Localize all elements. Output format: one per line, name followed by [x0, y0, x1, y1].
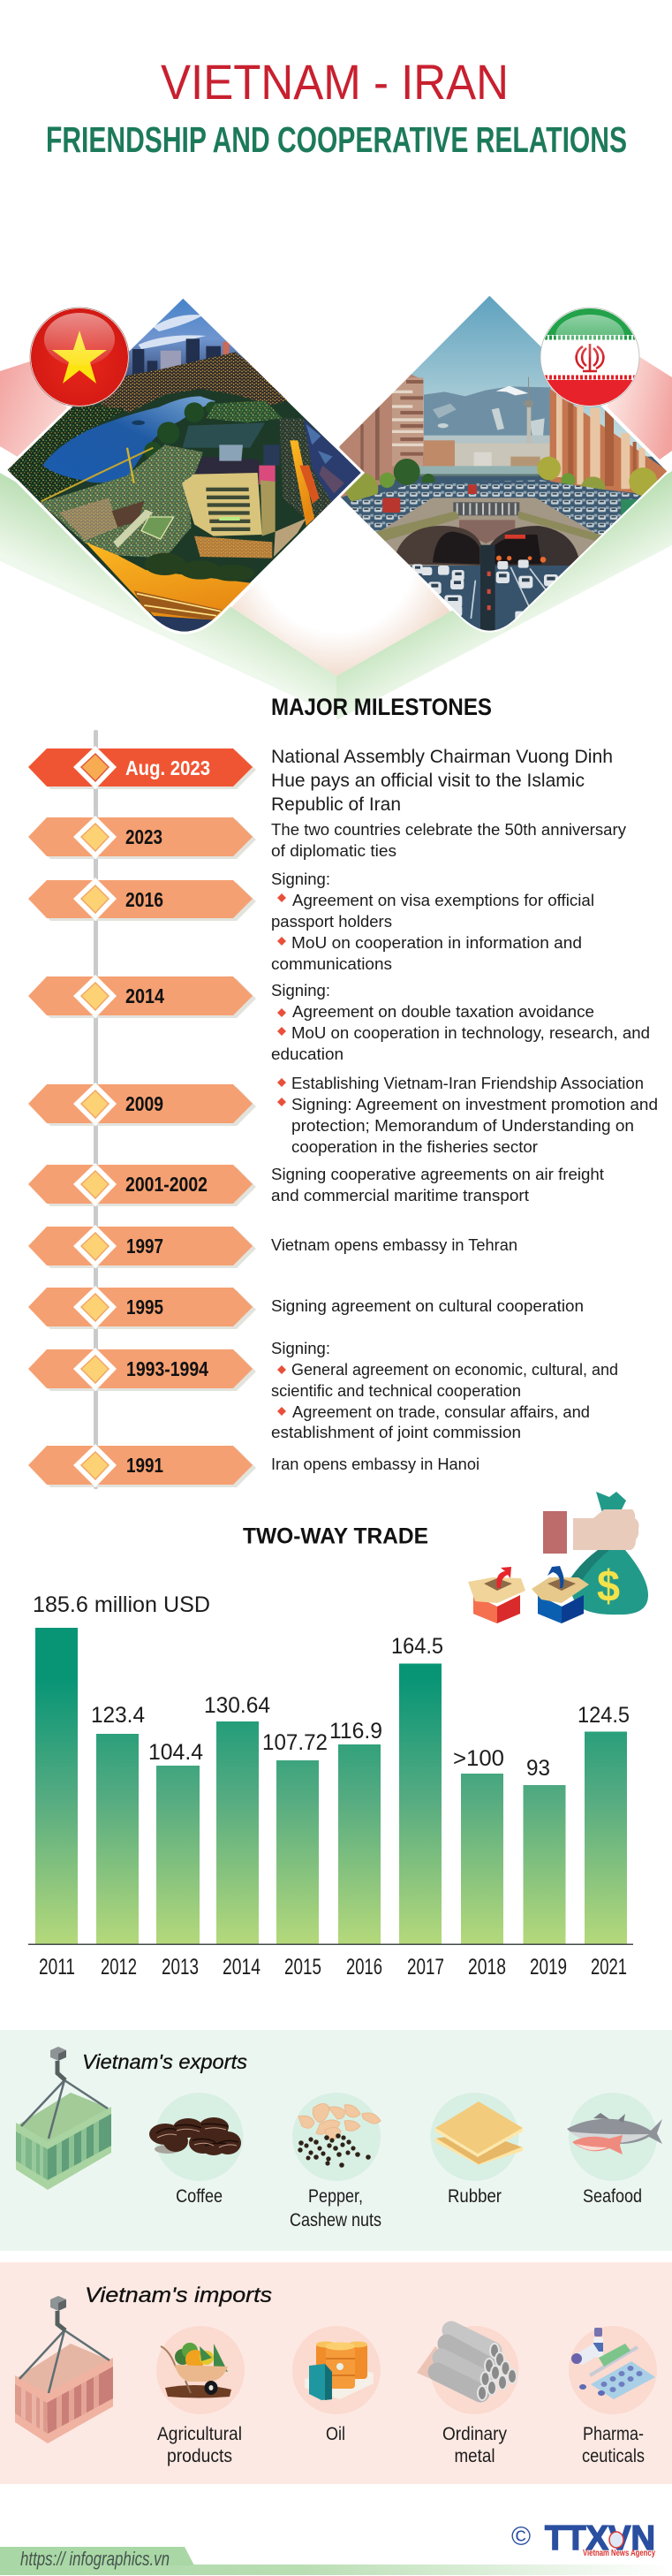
hero background ribbons — [0, 356, 672, 720]
milestone text: 1993-1994: scientific and technical cooperation — [271, 1381, 521, 1400]
icon: green cargo container on crane hook — [16, 2047, 111, 2190]
milestone text: 2016: passport holders — [271, 912, 392, 931]
icon: red cargo container on crane hook — [15, 2296, 113, 2443]
bar: 2011 — [33, 1592, 210, 1979]
product: rubber sheets — [431, 2093, 523, 2181]
milestone text: 2016 — [271, 870, 594, 973]
milestone marker: 2016 — [28, 878, 256, 921]
bar: 2018: >100 — [453, 1746, 504, 1771]
milestone text: 2009: Establishing Vietnam-Iran Friendship Association — [291, 1074, 644, 1092]
timeline spine — [94, 730, 98, 1489]
bar: 2014: 2014 — [223, 1955, 260, 1979]
bar: 2016: 2016 — [346, 1955, 382, 1979]
milestone marker: 2023: 2023 — [125, 825, 162, 848]
footer band — [0, 2547, 672, 2575]
bar: 2012: 123.4 — [91, 1703, 145, 1728]
milestone marker: 2009: 2009 — [125, 1092, 163, 1115]
bar: 2011: 2011 — [39, 1955, 75, 1979]
logo: TTXVN Vietnam News Agency: TTXVN — [545, 2519, 655, 2557]
label: Pharmaceuticals: Pharma- — [583, 2424, 644, 2444]
milestone text: 1991: Iran opens embassy in Hanoi — [271, 1455, 479, 1473]
label: Ordinary metal — [442, 2424, 507, 2466]
milestone text: 2014: MoU on cooperation in technology, research, and — [291, 1023, 650, 1042]
milestone text: 1993-1994: establishment of joint commission — [271, 1423, 521, 1441]
milestone marker: 1993-1994 — [28, 1348, 256, 1391]
bar: 2018: 2018 — [468, 1955, 506, 1979]
icon: hand holding money bag and trade boxes: $ — [597, 1562, 620, 1611]
heading: Vietnam's imports: Vietnam's imports — [85, 2283, 272, 2307]
milestone marker: 2014: 2014 — [125, 984, 164, 1007]
milestone text: 2001-2002 — [271, 1165, 604, 1204]
icon: hand holding money bag and trade boxes — [468, 1492, 648, 1623]
label: Coffee: Coffee — [176, 2186, 223, 2207]
label: Pepper, Cashew nuts: Cashew nuts — [290, 2210, 381, 2230]
milestone text: 1993-1994 — [271, 1339, 618, 1441]
milestone marker: 1997: 1997 — [126, 1235, 163, 1258]
logo: TTXVN Vietnam News Agency: © — [511, 2522, 531, 2551]
label: Pharmaceuticals: ceuticals — [582, 2446, 645, 2466]
photo: Hanoi city view — [6, 292, 363, 636]
milestone text: 2016: MoU on cooperation in information and — [291, 933, 582, 952]
milestone marker: 2023 — [28, 816, 256, 859]
product: coffee — [149, 2093, 244, 2181]
bar chart: two-way trade — [28, 1592, 633, 1979]
milestone text: 2023: of diplomatic ties — [271, 841, 396, 860]
bar: 2016 — [329, 1719, 382, 1979]
milestone marker: 1997 — [28, 1225, 256, 1268]
milestone text: 1993-1994: General agreement on economic, cultural, and — [291, 1360, 618, 1379]
bar: 2017 — [391, 1634, 444, 1979]
photo: Tehran city view — [339, 295, 668, 633]
bar: 2021: 2021 — [591, 1955, 627, 1979]
label: Pepper, Cashew nuts: Pepper, — [308, 2186, 363, 2207]
milestone marker: 1995: 1995 — [126, 1296, 163, 1318]
bar: 2019: 2019 — [530, 1955, 567, 1979]
milestone text: 2023: The two countries celebrate the 50th anniversary — [271, 820, 627, 839]
milestone text: 2009 — [277, 1074, 658, 1156]
product: oil — [292, 2326, 381, 2414]
milestone text: 2016: Signing: — [271, 870, 330, 888]
milestone marker: 2001-2002: 2001-2002 — [125, 1173, 208, 1196]
panel: Vietnam's imports — [0, 2262, 672, 2484]
footer url: https:// infographics.vn — [20, 2548, 170, 2570]
milestone text: 2009: protection; Memorandum of Understanding on — [291, 1116, 634, 1135]
milestone marker: 1991 — [28, 1444, 256, 1487]
milestone text: 2001-2002: Signing cooperative agreements on air freight — [271, 1165, 604, 1183]
bar: 2015 — [262, 1730, 328, 1979]
bar: 2018 — [453, 1746, 506, 1979]
milestone text: 2016: Agreement on visa exemptions for official — [292, 891, 594, 909]
milestone text: 1993-1994: Agreement on trade, consular affairs, and — [292, 1402, 590, 1421]
heading: two-way trade: TWO-WAY TRADE — [243, 1524, 428, 1548]
milestone marker: 2014 — [28, 975, 256, 1018]
bar: 2021: 124.5 — [578, 1703, 630, 1728]
icon: Iran flag — [539, 305, 641, 411]
bar: 2014 — [204, 1693, 270, 1979]
milestone text: 2014: education — [271, 1045, 344, 1063]
milestone text: 1995: Signing agreement on cultural cooperation — [271, 1296, 584, 1315]
milestone text: 2014: Agreement on double taxation avoidance — [292, 1002, 594, 1021]
milestone text: 2023 — [271, 820, 627, 860]
milestone marker: 1991: 1991 — [126, 1454, 163, 1477]
bar: 2012 — [91, 1703, 145, 1979]
milestone marker: Aug. 2023 — [28, 746, 256, 789]
milestone text: Aug. 2023: Hue pays an official visit to the Islamic — [271, 771, 585, 791]
bar: 2012: 2012 — [101, 1955, 137, 1979]
bar: 2015: 107.72 — [262, 1730, 328, 1755]
bar: 2019: 93 — [526, 1756, 550, 1781]
milestone text: 2009: cooperation in the fisheries sector — [291, 1137, 538, 1156]
icon: Vietnam flag — [30, 308, 129, 407]
label: Pharmaceuticals — [582, 2424, 645, 2466]
product: pepper and cashew nuts — [292, 2093, 381, 2181]
milestone text: Aug. 2023: National Assembly Chairman Vuong Dinh — [271, 747, 613, 767]
bar: 2014: 130.64 — [204, 1693, 270, 1718]
product: agricultural products — [156, 2326, 245, 2414]
product: seafood — [567, 2093, 662, 2181]
milestone text: 2014 — [271, 981, 650, 1063]
product: ordinary metal — [417, 2326, 519, 2414]
milestone marker: 1993-1994: 1993-1994 — [126, 1357, 208, 1380]
milestone text: 2001-2002: and commercial maritime transport — [271, 1186, 529, 1204]
label: Seafood: Seafood — [583, 2186, 642, 2207]
label: Oil: Oil — [326, 2424, 345, 2444]
heading: Vietnam's exports: Vietnam's exports — [82, 2050, 248, 2073]
milestone text: 1993-1994: Signing: — [271, 1339, 330, 1357]
bar: 2017: 164.5 — [391, 1634, 443, 1659]
milestone text: 1997: Vietnam opens embassy in Tehran — [271, 1235, 517, 1254]
milestone marker: 2009 — [28, 1083, 256, 1126]
bar: 2017: 2017 — [407, 1955, 444, 1979]
milestone marker: 2001-2002 — [28, 1163, 256, 1206]
bar: 2011: 185.6 million USD — [33, 1592, 210, 1617]
bar: 2013: 2013 — [162, 1955, 199, 1979]
bar: 2013 — [148, 1740, 203, 1979]
heading: major milestones: MAJOR MILESTONES — [271, 694, 492, 720]
product: pharmaceuticals — [569, 2326, 657, 2414]
label: Agricultural products: Agricultural — [157, 2424, 242, 2444]
bar: 2016: 116.9 — [329, 1719, 382, 1744]
bar: 2015: 2015 — [284, 1955, 321, 1979]
milestone marker: 1995 — [28, 1286, 256, 1329]
label: Ordinary metal: Ordinary — [442, 2424, 507, 2444]
label: Pepper, Cashew nuts — [290, 2186, 381, 2230]
bar: 2021 — [578, 1703, 630, 1979]
label: Agricultural products — [157, 2424, 242, 2466]
bar: 2013: 104.4 — [148, 1740, 203, 1765]
label: Rubber: Rubber — [448, 2186, 502, 2207]
milestone text: 2009: Signing: Agreement on investment promotion and — [291, 1095, 658, 1113]
label: Ordinary metal: metal — [454, 2446, 495, 2466]
bar: 2019 — [523, 1756, 567, 1979]
milestone text: Aug. 2023 — [271, 747, 613, 815]
title: VIETNAM - IRAN — [161, 54, 509, 110]
milestone marker: Aug. 2023: Aug. 2023 — [125, 756, 210, 779]
label: Agricultural products: products — [167, 2446, 232, 2466]
milestone marker: 2016: 2016 — [125, 888, 163, 911]
panel: Vietnam's exports — [0, 2030, 672, 2251]
milestone text: Aug. 2023: Republic of Iran — [271, 794, 401, 815]
milestone text: 2014: Signing: — [271, 981, 330, 999]
milestone text: 2016: communications — [271, 954, 392, 973]
